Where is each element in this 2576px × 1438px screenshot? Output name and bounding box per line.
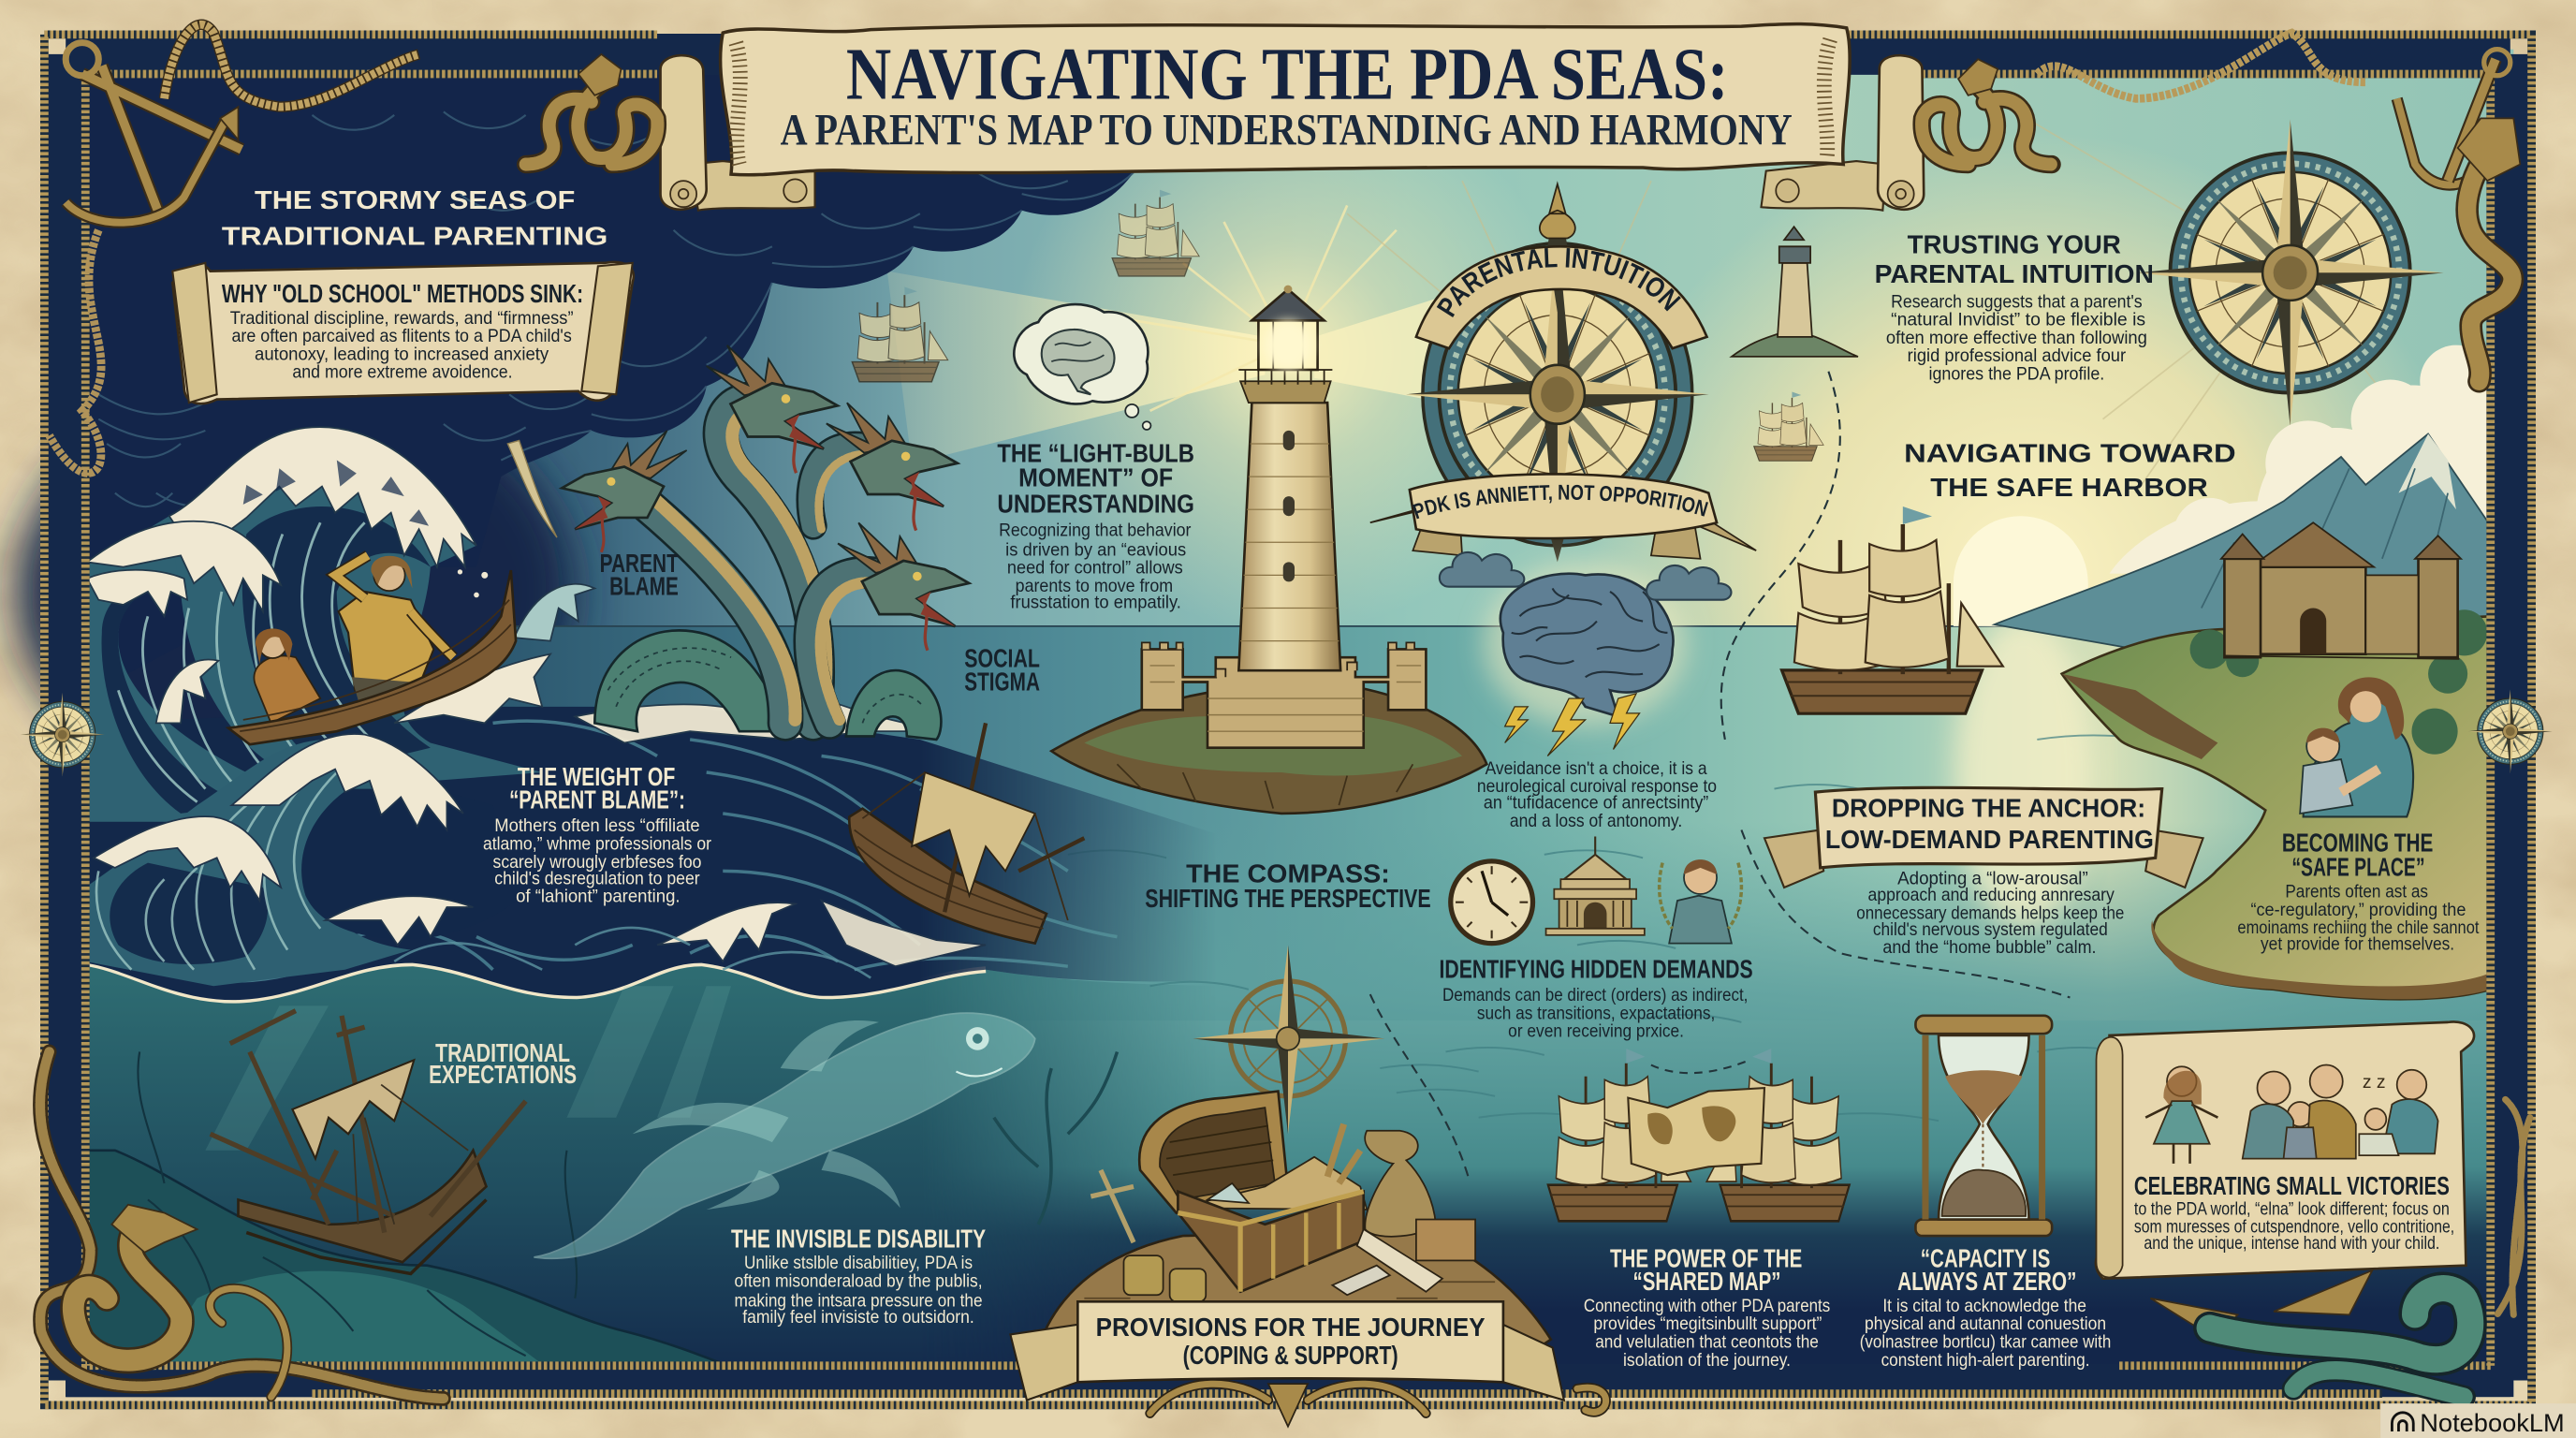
dashed routes xyxy=(1370,372,2070,1179)
text: social stigma label: STIGMA xyxy=(964,667,1040,696)
small scroll: why old school methods sink: and more extreme avoidence. xyxy=(292,363,513,383)
text: low-demand parenting: and the “home bubble” calm. xyxy=(1882,938,2097,958)
distant ship left xyxy=(852,286,948,382)
text: trusting your parental intuition: often more effective than following xyxy=(1886,329,2147,348)
text: invisible disability xyxy=(731,1224,986,1328)
right scroll dragon xyxy=(1922,59,2052,165)
text: invisible disability: making the intsara pressure on the xyxy=(735,1292,983,1312)
text: light-bulb moment: THE “LIGHT-BULB xyxy=(997,438,1194,467)
bottom left dragon xyxy=(40,1051,444,1399)
small scroll: why old school methods sink xyxy=(172,262,634,404)
text: power of the shared map: THE POWER OF THE xyxy=(1610,1243,1802,1272)
banner: parental intuition: PARENTAL INTUITION xyxy=(1436,248,1681,317)
victories heading and text: and the unique, intense hand with your child. xyxy=(2144,1234,2439,1254)
text: light-bulb moment: need for control” allows xyxy=(1007,559,1183,579)
girl figure xyxy=(2145,1066,2217,1164)
heading: navigating toward the safe harbor: THE SAFE HARBOR xyxy=(1930,473,2208,502)
victories heading and text xyxy=(2134,1171,2454,1254)
text: becoming the safe place: emoinams rechiing the chile sannot xyxy=(2237,918,2480,938)
top right anchor xyxy=(2037,33,2510,185)
text: identifying hidden demands: Demands can be direct (orders) as indirect, xyxy=(1442,986,1748,1005)
text: avoidance isn't a choice: an “tufidacence of anrectsinty” xyxy=(1484,794,1708,814)
small scroll: why old school methods sink: autonoxy, leading to increased anxiety xyxy=(255,345,549,364)
small scroll: why old school methods sink: are often parcaived as flitents to a PDA child's xyxy=(231,327,572,346)
torn sail ship xyxy=(849,723,1084,944)
text: light-bulb moment: is driven by an “eavious xyxy=(1005,540,1186,560)
lighthouse xyxy=(1238,286,1340,670)
text: low-demand parenting xyxy=(1856,869,2124,958)
text: parent blame label: BLAME xyxy=(609,571,679,600)
right frame dragon xyxy=(2458,118,2520,381)
text: becoming the safe place: Parents often ast as xyxy=(2285,882,2428,902)
text: trusting your parental intuition: rigid professional advice four xyxy=(1908,346,2127,366)
provisions banner: PROVISIONS FOR THE JOURNEY xyxy=(1096,1313,1486,1342)
mother holding child xyxy=(2300,677,2413,816)
hydra head lower xyxy=(838,522,969,651)
person with hand on heart xyxy=(1660,859,1741,944)
title: NAVIGATING THE PDA SEAS: xyxy=(846,34,1728,115)
celebrating small victories scroll xyxy=(2096,1021,2474,1279)
text: invisible disability: often misonderaload by the publis, xyxy=(735,1271,983,1292)
text: power of the shared map: and velulatien that ceontots the xyxy=(1595,1332,1819,1352)
right coast and safe harbor land xyxy=(2062,609,2491,999)
text: capacity is always at zero: ALWAYS AT ZERO” xyxy=(1897,1267,2076,1296)
lower storm sea band xyxy=(85,707,1281,1000)
text: trusting your parental intuition: PARENTAL INTUITION xyxy=(1875,259,2154,288)
text: avoidance isn't a choice xyxy=(1477,759,1717,831)
text: parent blame label xyxy=(600,549,679,600)
text: social stigma label xyxy=(964,644,1040,696)
surface line xyxy=(87,963,986,1000)
island with castle base xyxy=(1051,642,1486,814)
hydra body coils xyxy=(594,630,941,740)
text: light-bulb moment: frusstation to empatily. xyxy=(1010,594,1181,613)
heading: the compass xyxy=(1145,859,1431,913)
text: trusting your parental intuition: Research suggests that a parent's xyxy=(1891,292,2143,312)
title: A PARENT'S MAP TO UNDERSTANDING AND HARMONY xyxy=(781,106,1793,154)
family figure xyxy=(2243,1065,2356,1159)
NotebookLM badge xyxy=(2380,1403,2576,1438)
text: light-bulb moment xyxy=(997,438,1194,613)
text: identifying hidden demands: IDENTIFYING HIDDEN DEMANDS xyxy=(1439,954,1753,983)
ribbon: dropping the anchor xyxy=(1764,787,2203,888)
treasure chest xyxy=(1090,1092,1475,1301)
text: weight of parent blame: atlamo,” whme professionals or xyxy=(483,835,711,855)
ghost sea creature xyxy=(534,1013,1035,1258)
text: power of the shared map: “SHARED MAP” xyxy=(1633,1267,1781,1296)
boat with parent and child xyxy=(228,555,516,744)
ribbon: PDA is anxiety: PDK IS ANNIETT, NOT OPPORITION xyxy=(1412,485,1708,519)
left scroll dragon xyxy=(526,54,657,165)
parent and baby figure: z z xyxy=(2363,1073,2386,1093)
text: avoidance isn't a choice: Aveidance isn't a choice, it is a xyxy=(1486,759,1707,779)
underwater panel xyxy=(66,961,1281,1397)
text: weight of parent blame xyxy=(483,762,711,907)
distant ship upper xyxy=(1112,190,1199,276)
sun xyxy=(1954,516,2088,626)
text: social stigma label: SOCIAL xyxy=(964,644,1040,673)
text: weight of parent blame: “PARENT BLAME”: xyxy=(509,785,685,814)
text: power of the shared map: provides “megitsinbullt support” xyxy=(1593,1314,1822,1334)
heading: the compass: SHIFTING THE PERSPECTIVE xyxy=(1145,884,1431,913)
text: low-demand parenting: onnecessary demands helps keep the xyxy=(1856,903,2124,923)
far left compass medallion xyxy=(21,693,105,777)
small scroll: why old school methods sink: Traditional discipline, rewards, and “firmness” xyxy=(230,309,574,329)
text: avoidance isn't a choice: and a loss of antonomy. xyxy=(1510,812,1682,831)
provisions banner: (COPING & SUPPORT) xyxy=(1183,1341,1398,1370)
text: power of the shared map: Connecting with other PDA parents xyxy=(1584,1297,1830,1316)
text: light-bulb moment: MOMENT” OF xyxy=(1018,463,1173,492)
text: trusting your parental intuition: ignores the PDA profile. xyxy=(1928,365,2104,385)
text: capacity is always at zero: “CAPACITY IS xyxy=(1921,1243,2050,1272)
text: traditional expectations: TRADITIONAL xyxy=(435,1038,570,1067)
stormy brain xyxy=(1440,552,1731,756)
text: low-demand parenting: approach and reducing annresary xyxy=(1868,886,2115,905)
text: weight of parent blame: child's desregulation to peer xyxy=(494,869,700,888)
victories heading and text: to the PDA world, “elna” look different; focus on xyxy=(2134,1199,2450,1219)
treasure island xyxy=(1045,1229,1551,1372)
right ship xyxy=(1706,1049,1850,1221)
big wave foam crests xyxy=(87,427,940,742)
heading: navigating toward the safe harbor: NAVIGATING TOWARD xyxy=(1904,438,2236,467)
far right compass medallion xyxy=(2468,689,2553,773)
ribbon: dropping the anchor: DROPPING THE ANCHOR: xyxy=(1832,793,2145,822)
small lighthouse xyxy=(1732,227,1858,357)
left ship xyxy=(1548,1049,1690,1221)
parental intuition compass xyxy=(1370,181,1757,562)
heading: the compass: THE COMPASS: xyxy=(1186,859,1390,888)
text: traditional expectations xyxy=(429,1038,577,1089)
text: trusting your parental intuition: “natural Invidist” to be flexible is xyxy=(1891,311,2145,330)
heading: stormy seas xyxy=(222,185,607,251)
text: capacity is always at zero: physical and autannal conuestion xyxy=(1865,1314,2106,1334)
upper wave hollows and bodies xyxy=(87,427,542,822)
shared map ships xyxy=(1548,1049,1850,1221)
NotebookLM badge: NotebookLM xyxy=(2420,1408,2565,1437)
small compass over treasure xyxy=(1193,945,1385,1134)
clock xyxy=(1451,861,1533,944)
text: light-bulb moment: parents to move from xyxy=(1016,577,1173,596)
thought bubble with brain xyxy=(1014,304,1150,430)
text: becoming the safe place: “ce-regulatory,” providing the xyxy=(2250,901,2466,920)
title scroll xyxy=(661,24,1924,211)
text: weight of parent blame: Mothers often less “offiliate xyxy=(494,816,700,836)
sea xyxy=(66,616,2513,1397)
text: light-bulb moment: Recognizing that behavior xyxy=(999,521,1192,540)
heading: stormy seas: THE STORMY SEAS OF xyxy=(255,185,575,214)
text: weight of parent blame: scarely wrougly erbfeses foo xyxy=(493,853,701,873)
text: power of the shared map: isolation of the journey. xyxy=(1623,1351,1791,1371)
text: low-demand parenting: Adopting a “low-arousal” xyxy=(1897,869,2088,888)
provisions banner xyxy=(1010,1301,1564,1401)
harbor castle xyxy=(2221,522,2461,659)
text: trusting your parental intuition xyxy=(1875,229,2154,385)
left roll xyxy=(661,55,815,211)
victories heading and text: som muresses of cutspendnore, vello contritione, xyxy=(2134,1218,2454,1238)
lower right sea serpent xyxy=(2150,1099,2530,1397)
building xyxy=(1546,837,1645,935)
light rays from lighthouse and compasses xyxy=(887,115,2448,493)
text: trusting your parental intuition: TRUSTING YOUR xyxy=(1908,229,2121,258)
lower waves xyxy=(85,734,986,986)
text: identifying hidden demands: or even receiving prxice. xyxy=(1508,1022,1684,1042)
text: weight of parent blame: THE WEIGHT OF xyxy=(518,762,675,791)
text: becoming the safe place: “SAFE PLACE” xyxy=(2291,853,2425,882)
bottom center ornament xyxy=(1150,1384,1606,1427)
text: capacity is always at zero: (volnastree bortlcu) tkar camee with xyxy=(1860,1332,2111,1352)
hydra head left xyxy=(562,431,687,552)
victories heading and text: CELEBRATING SMALL VICTORIES xyxy=(2134,1171,2450,1200)
hydra necks xyxy=(633,400,896,723)
ribbon: PDA is anxiety xyxy=(1370,473,1757,560)
clouds behind mountain xyxy=(2110,345,2492,575)
right compass xyxy=(2137,119,2444,426)
right roll xyxy=(1761,55,1924,211)
heading: stormy seas: TRADITIONAL PARENTING xyxy=(222,222,607,251)
text: invisible disability: Unlike stslble disabilitiey, PDA is xyxy=(744,1254,973,1273)
big sailing ship xyxy=(1782,506,2003,713)
banner: parental intuition xyxy=(1414,245,1709,350)
text: traditional expectations: EXPECTATIONS xyxy=(429,1060,577,1089)
text: identifying hidden demands xyxy=(1439,954,1753,1042)
mountains xyxy=(1995,433,2491,657)
text: light-bulb moment: UNDERSTANDING xyxy=(997,490,1194,519)
storm clouds xyxy=(17,50,1150,805)
hydra head top xyxy=(707,345,838,473)
heading: navigating toward the safe harbor xyxy=(1904,438,2236,502)
storm cloud right xyxy=(1647,565,1731,600)
text: low-demand parenting: child's nervous system regulated xyxy=(1873,920,2108,940)
text: becoming the safe place xyxy=(2237,828,2480,955)
text: weight of parent blame: of “lahiont” parenting. xyxy=(516,888,681,907)
storm cloud left xyxy=(1440,552,1524,587)
text: parent blame label: PARENT xyxy=(600,549,679,578)
parent and baby figure xyxy=(2359,1070,2438,1155)
small scroll: why old school methods sink: WHY "OLD SCHOOL" METHODS SINK: xyxy=(222,279,583,308)
underwater light shafts xyxy=(205,986,731,1151)
hydra head right xyxy=(827,403,958,531)
hydra sea monster xyxy=(562,345,969,740)
shipwreck xyxy=(211,1011,526,1273)
text: avoidance isn't a choice: neurolegical curoival response to xyxy=(1477,777,1717,797)
top left anchor and rope xyxy=(50,24,419,473)
ribbon: dropping the anchor: LOW-DEMAND PARENTING xyxy=(1825,825,2154,854)
text: invisible disability: family feel invisiste to outsidorn. xyxy=(742,1308,974,1328)
text: power of the shared map xyxy=(1584,1243,1830,1371)
hourglass xyxy=(1915,1016,2052,1236)
small ship xyxy=(1754,391,1823,461)
text: identifying hidden demands: such as transitions, expactations, xyxy=(1477,1004,1715,1023)
text: capacity is always at zero: constent high-alert parenting. xyxy=(1881,1351,2089,1371)
text: capacity is always at zero: It is cital to acknowledge the xyxy=(1882,1297,2086,1316)
text: capacity is always at zero xyxy=(1860,1243,2111,1371)
text: becoming the safe place: yet provide for themselves. xyxy=(2261,935,2454,955)
text: becoming the safe place: BECOMING THE xyxy=(2282,828,2433,857)
text: invisible disability: THE INVISIBLE DISABILITY xyxy=(731,1224,986,1253)
seabed mounds xyxy=(85,1051,1117,1388)
title xyxy=(781,34,1793,154)
map xyxy=(1628,1088,1764,1175)
